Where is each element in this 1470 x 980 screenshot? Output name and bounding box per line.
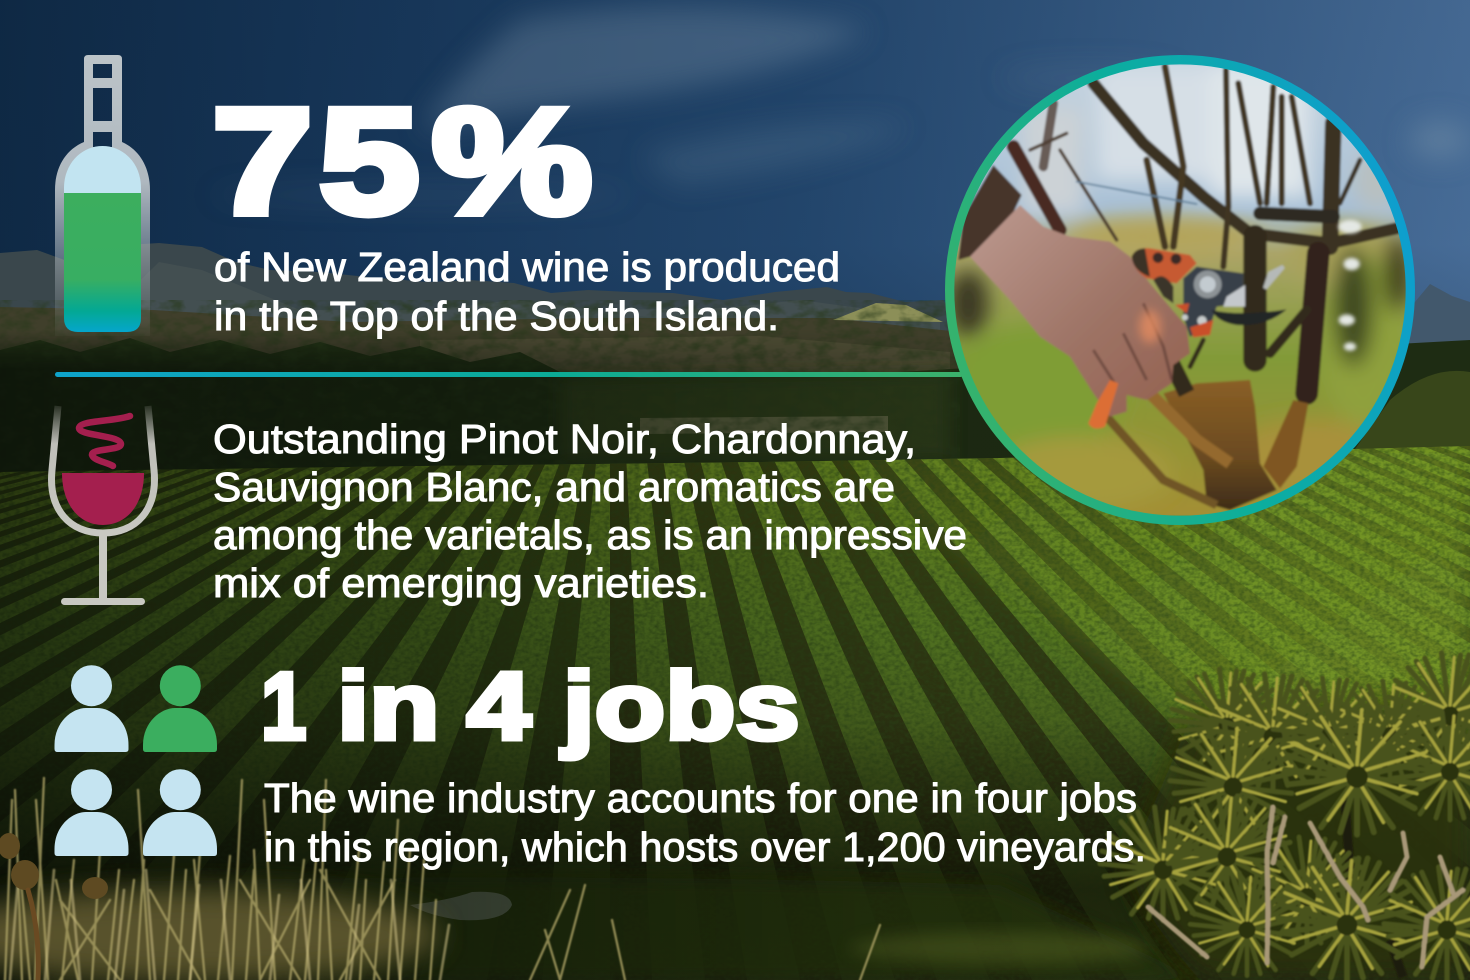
- text: varietals: [213, 416, 967, 606]
- text: varietals: mix of emerging varieties.: [213, 560, 709, 606]
- sunlit upper-right of the field: [878, 446, 1470, 718]
- text: jobs and vineyards: [264, 775, 1146, 870]
- gradient ring: [950, 60, 1410, 520]
- foreground cabbage trees: [1100, 653, 1470, 980]
- foreground ground shadow: [0, 720, 1470, 980]
- text: varietals: Sauvignon Blanc, and aromatics are: [213, 464, 895, 510]
- sleeve: [958, 165, 1022, 260]
- icon: four people, one highlighted: [54, 665, 217, 856]
- heading: 75%: 75%: [212, 78, 592, 246]
- person 4: [143, 769, 217, 856]
- heading: 1 in 4 jobs: 1: [261, 652, 306, 759]
- person 2: highlighted: [143, 665, 217, 752]
- pruner: [1132, 248, 1287, 337]
- vine branches: [1013, 67, 1397, 393]
- text: share of New Zealand wine: [214, 244, 840, 339]
- puddle: [410, 892, 512, 920]
- blossoms: [1338, 220, 1362, 351]
- dark tree band: [0, 338, 1470, 490]
- vineyard field: [0, 446, 1470, 980]
- seed heads: [0, 833, 108, 899]
- photo circle: hand pruning a vine: [948, 60, 1410, 520]
- vine rows, right fan: [610, 446, 1470, 980]
- foreground grasses: [0, 778, 880, 980]
- text: varietals: among the varietals, as is an impressive: [213, 512, 967, 558]
- text: varietals: Outstanding Pinot Noir, Chardonnay,: [213, 416, 916, 462]
- person 3: [54, 769, 128, 856]
- divider line: [55, 372, 963, 377]
- text: jobs and vineyards: The wine industry accounts for one in four jobs: [264, 775, 1137, 821]
- heading: 1 in 4 jobs: jobs: [561, 653, 800, 760]
- text: jobs and vineyards: in this region, which hosts over 1,200 vineyards.: [264, 824, 1146, 870]
- mountains: [0, 243, 1470, 380]
- sky: [0, 0, 1470, 350]
- text: share of New Zealand wine: of New Zealand wine is produced: [214, 244, 840, 290]
- heading: 1 in 4 jobs: [261, 652, 800, 760]
- icon: wine glass: [52, 406, 154, 605]
- vine trunk: [1107, 360, 1308, 510]
- icon: wine bottle: [55, 55, 150, 336]
- heading: 1 in 4 jobs: 4: [467, 653, 531, 760]
- photo contents: [948, 63, 1410, 517]
- left darkening overlay: [0, 339, 1090, 980]
- text: share of New Zealand wine: in the Top of the South Island.: [214, 293, 779, 339]
- heading: 1 in 4 jobs: in: [337, 653, 440, 760]
- vine rows, left fan: [0, 464, 596, 870]
- person 1: [54, 665, 128, 752]
- hand: [970, 205, 1190, 417]
